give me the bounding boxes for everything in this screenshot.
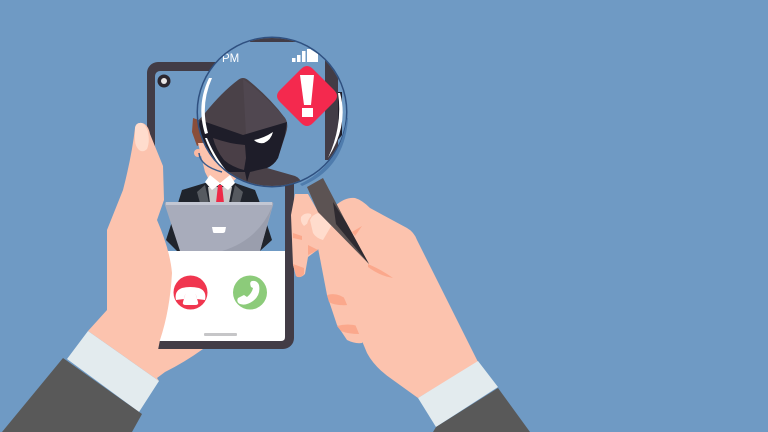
magnifier handle xyxy=(307,178,369,264)
hood xyxy=(198,78,300,186)
left hand thumb and palm xyxy=(88,123,172,381)
magnified phone frame xyxy=(250,36,345,160)
signal bars xyxy=(292,49,318,62)
camera xyxy=(158,74,170,88)
call panel xyxy=(155,251,285,341)
lens glare right xyxy=(328,93,343,158)
mask and lower hood xyxy=(195,120,287,182)
lapels xyxy=(197,185,243,203)
knuckle creases xyxy=(368,264,393,278)
right shirt cuff xyxy=(418,361,498,427)
eye xyxy=(254,132,273,143)
tie xyxy=(216,185,224,203)
home indicator xyxy=(204,333,237,336)
clock text: PM xyxy=(222,53,239,65)
left sleeve xyxy=(2,358,142,432)
hooded scammer xyxy=(198,78,300,186)
neck and face xyxy=(198,143,240,186)
jacket xyxy=(166,183,272,251)
lens glare left xyxy=(201,78,212,134)
laptop xyxy=(165,202,273,251)
right hand back finger xyxy=(291,194,320,277)
phone xyxy=(147,62,294,349)
left palm behind phone xyxy=(150,345,203,378)
headset xyxy=(199,153,222,172)
lens rim xyxy=(300,118,348,186)
collar xyxy=(205,175,235,190)
shirt xyxy=(208,187,232,203)
illustration: phone scam call under a magnifying glass xyxy=(2,36,530,432)
magnifying glass xyxy=(190,36,348,195)
phone screen xyxy=(155,71,285,341)
hair xyxy=(192,118,203,146)
right hand lower fingers xyxy=(318,240,385,343)
right hand xyxy=(307,198,478,398)
right sleeve xyxy=(433,388,530,432)
man in suit xyxy=(166,118,272,251)
lens xyxy=(196,36,348,188)
decline button xyxy=(174,276,208,310)
thumbnail xyxy=(135,123,149,151)
hood fold xyxy=(284,117,286,119)
phone body xyxy=(147,62,294,349)
thumbnail xyxy=(310,213,333,240)
face xyxy=(213,138,246,170)
accept button xyxy=(233,276,267,310)
ear xyxy=(194,149,202,157)
left shirt cuff xyxy=(67,331,159,412)
warning icon xyxy=(277,66,337,126)
